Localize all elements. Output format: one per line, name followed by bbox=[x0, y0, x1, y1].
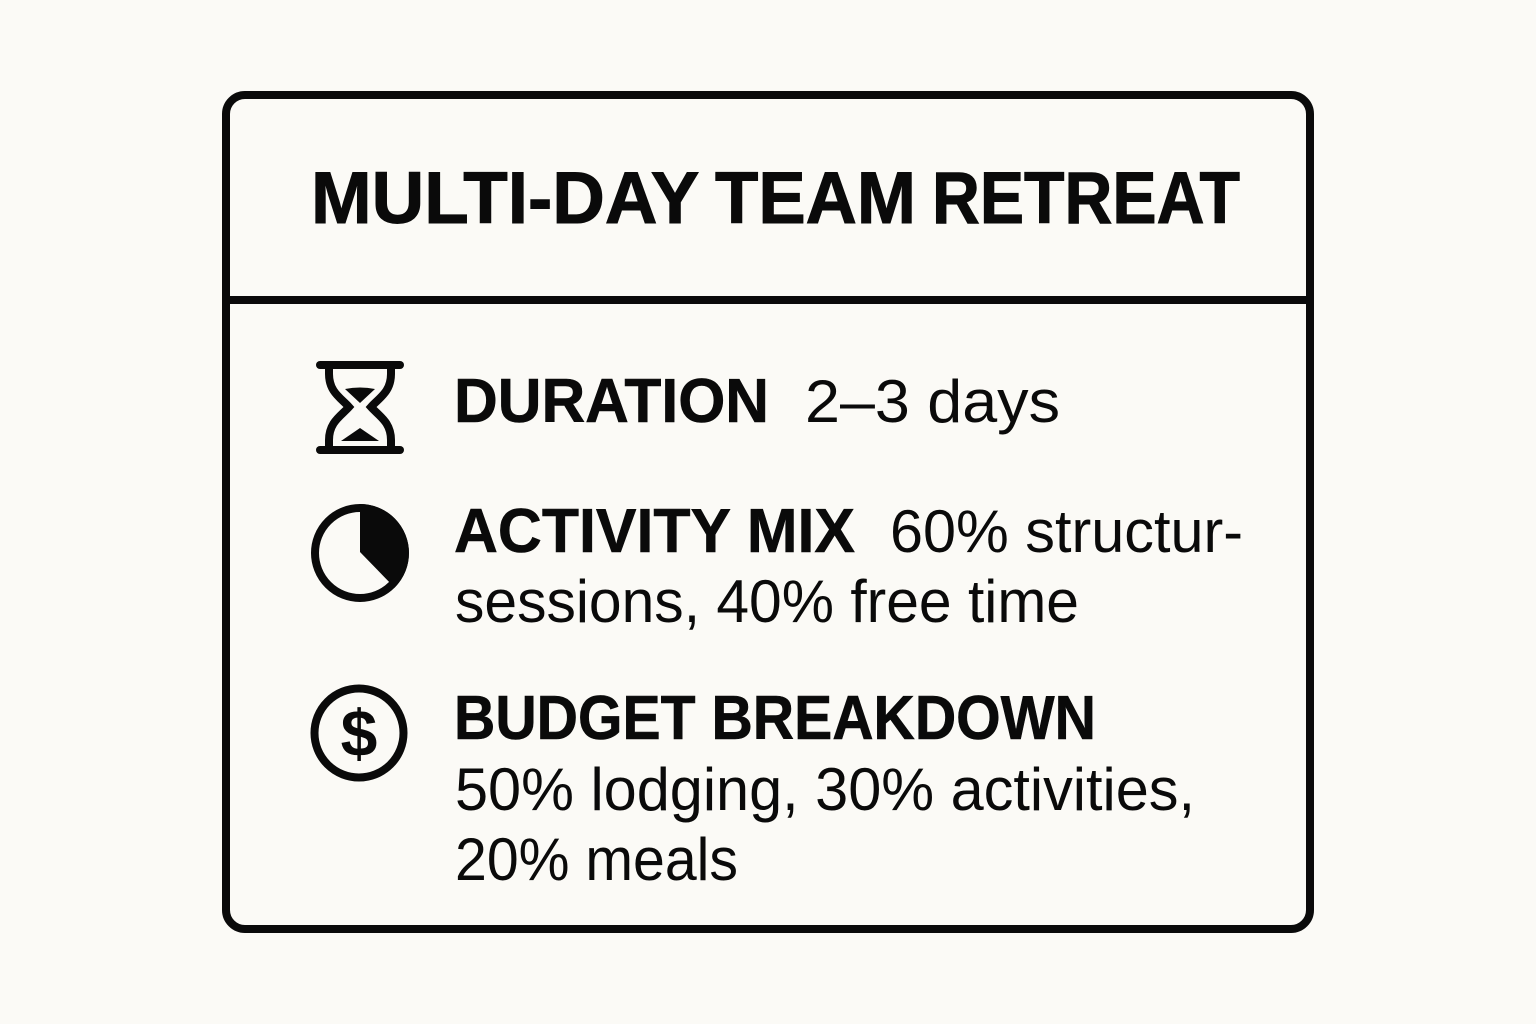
value: budget line 2: 20% meals bbox=[455, 826, 738, 893]
title: MULTI-DAY bbox=[311, 158, 699, 239]
label: budget breakdown: BUDGET BREAKDOWN bbox=[454, 684, 1096, 753]
value: duration: 2–3 days bbox=[805, 368, 1060, 435]
title: TEAM bbox=[715, 158, 916, 239]
title: RETREAT bbox=[932, 158, 1240, 239]
icon: dollar coin bbox=[314, 688, 404, 778]
label: duration: DURATION bbox=[454, 367, 769, 436]
icon: dollar coin: $ bbox=[341, 696, 377, 770]
panel: retreat card bbox=[226, 95, 1310, 929]
icon: hourglass bbox=[316, 361, 404, 454]
label: activity mix: ACTIVITY MIX bbox=[454, 497, 855, 566]
value: activity mix line 1: 60% structur- bbox=[890, 498, 1243, 565]
value: activity mix line 2: sessions, 40% free time bbox=[455, 568, 1079, 635]
value: budget line 1: 50% lodging, 30% activities, bbox=[455, 756, 1195, 823]
icon: pie chart bbox=[315, 504, 409, 598]
